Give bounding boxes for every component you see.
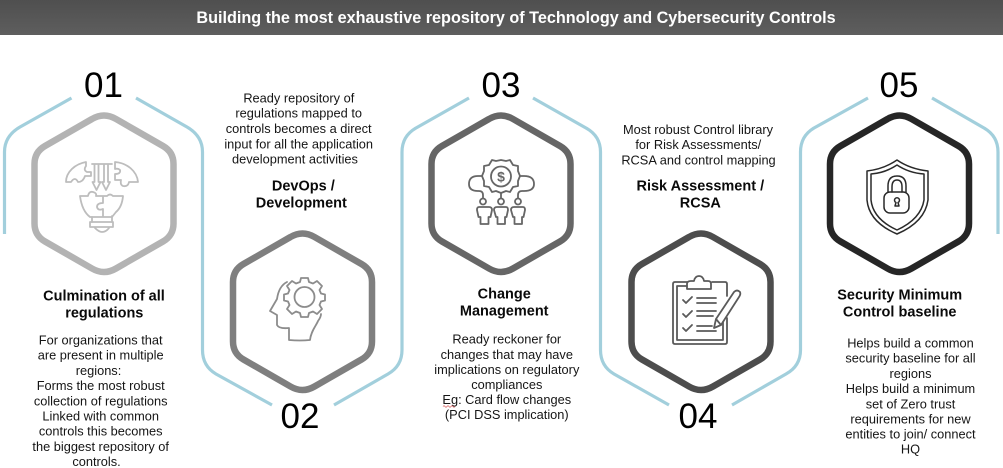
body: changes that may have: [441, 347, 573, 362]
body: set of Zero trust: [866, 396, 956, 411]
body: controls this becomes: [39, 424, 163, 439]
icon: puzzle pieces forming a light bulb: [66, 162, 138, 232]
number 02: 02: [281, 397, 319, 436]
title bar: [0, 0, 1003, 35]
hexagon 02: [233, 234, 372, 390]
body: collection of regulations: [34, 393, 168, 408]
body: regulations mapped to: [235, 106, 362, 121]
body: Helps build a common: [847, 336, 974, 351]
step 03: [432, 66, 570, 272]
heading: Culmination of all: [43, 288, 165, 304]
body: RCSA and control mapping: [621, 152, 776, 167]
heading: RCSA: [680, 195, 721, 211]
title bar: Building the most exhaustive repository of Technology and Cybersecurity Controls: [196, 9, 836, 27]
hexagon 03: [432, 116, 570, 272]
heading: Management: [460, 304, 549, 320]
number 01: 01: [84, 66, 123, 105]
body: regions: [890, 366, 931, 381]
icon: gear with dollar and three people: [469, 160, 534, 224]
heading: regulations: [65, 306, 143, 322]
text: change management: [434, 286, 580, 422]
heading: Control baseline: [843, 305, 957, 321]
heading: Change: [478, 286, 531, 302]
heading: Security Minimum: [837, 288, 962, 304]
body: Eg: Card flow changes: [442, 392, 571, 407]
text: security minimum control baseline: [837, 288, 976, 456]
body: entities to join/ connect: [845, 426, 976, 441]
step 02: [233, 234, 372, 436]
body: Ready repository of: [243, 90, 355, 105]
step 04: [632, 234, 770, 436]
body: implications on regulatory: [434, 362, 580, 377]
icon: shield with padlock: [867, 160, 928, 234]
body: compliances: [471, 377, 542, 392]
heading: Risk Assessment /: [636, 178, 764, 194]
body: Linked with common: [42, 408, 159, 424]
body: Helps build a minimum: [846, 381, 975, 396]
body: Most robust Control library: [623, 122, 774, 137]
icon: clipboard checklist with pencil: [673, 276, 740, 344]
body: HQ: [901, 442, 920, 456]
body: requirements for new: [850, 411, 971, 426]
heading: DevOps /: [272, 178, 335, 194]
text: devops / development: [224, 90, 373, 211]
body: are present in multiple: [38, 348, 164, 363]
body: Forms the most robust: [37, 378, 165, 393]
body: security baseline for all: [845, 351, 976, 366]
icon: head with gear: [270, 278, 325, 340]
body: regions:: [76, 363, 121, 378]
text: risk assessment / rcsa: [621, 122, 776, 211]
step 05: [830, 66, 969, 272]
number 04: 04: [679, 397, 717, 436]
body: controls becomes a direct: [226, 121, 372, 136]
hexagon 01: [34, 116, 174, 272]
body: the biggest repository of: [32, 439, 169, 454]
hexagon 05: [830, 116, 969, 272]
body: For organizations that: [39, 332, 163, 348]
hexagon 04: [632, 234, 770, 390]
body: development activities: [232, 151, 358, 166]
number 05: 05: [880, 66, 918, 105]
heading: Development: [256, 195, 347, 211]
step 01: [34, 66, 174, 272]
body: (PCI DSS implication): [445, 407, 569, 422]
body: for Risk Assessments/: [635, 137, 762, 152]
number 03: 03: [482, 66, 520, 105]
teal connecting frame: [4, 98, 998, 405]
icon: dollar sign: $: [497, 168, 505, 184]
body: Ready reckoner for: [452, 332, 562, 346]
body: input for all the application: [224, 136, 373, 151]
text: culmination of all regulations: [32, 288, 169, 468]
